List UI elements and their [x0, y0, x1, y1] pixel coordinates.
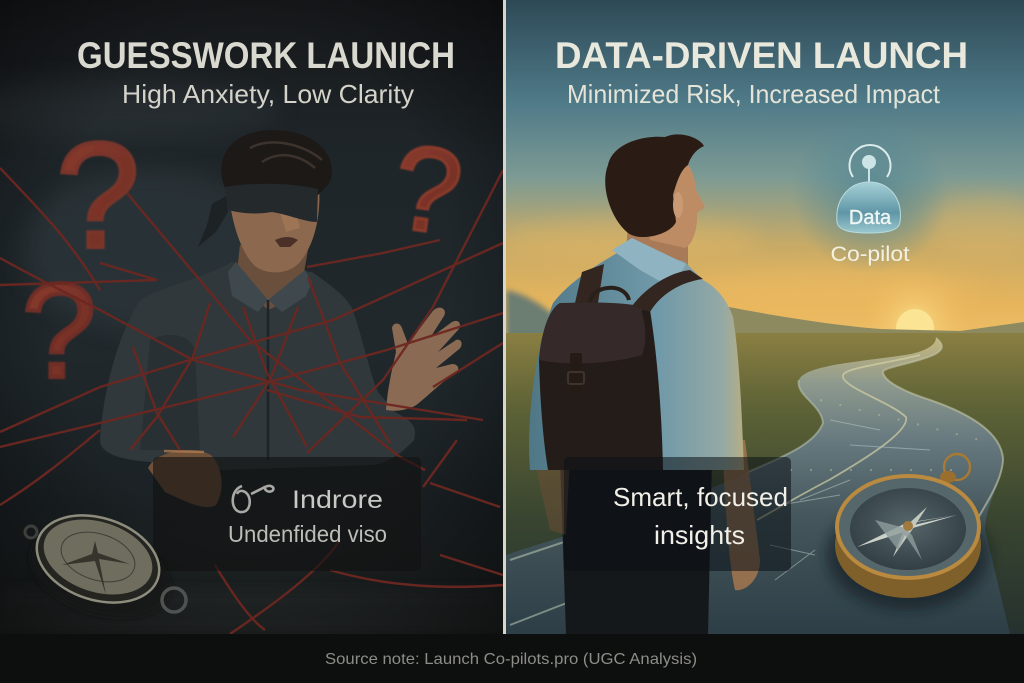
left arm	[536, 470, 570, 535]
center divider	[503, 0, 506, 634]
icon: question mark large: ?	[56, 111, 140, 279]
callout text: smart focused: Smart, focused	[613, 482, 788, 512]
shirt	[529, 245, 744, 470]
hair	[221, 130, 332, 195]
backpack	[539, 264, 703, 470]
panel: data-driven launch	[500, 0, 1024, 634]
shirt torso	[100, 262, 415, 470]
face	[231, 194, 320, 272]
title: data-driven launch: DATA-DRIVEN LAUNCH	[555, 35, 968, 76]
landscape	[506, 290, 1024, 634]
callout text: insights: insights	[654, 520, 745, 550]
title: guesswork launch: GUESSWORK LAUNICH	[77, 35, 455, 76]
head	[650, 164, 705, 248]
neck	[626, 232, 688, 265]
trousers	[560, 460, 712, 634]
callout heading: Indrore	[292, 486, 383, 514]
collar	[228, 262, 268, 312]
subtitle: minimized risk: Minimized Risk, Increased Impact	[567, 79, 941, 109]
icon: question mark lower: ?	[22, 257, 96, 406]
callout box: smart insights	[564, 457, 791, 571]
icon label: data: Data	[849, 207, 892, 229]
subtitle: high anxiety: High Anxiety, Low Clarity	[122, 79, 414, 109]
blindfold	[225, 184, 318, 222]
red tangled strings	[0, 168, 503, 634]
callout box: undefined vision	[153, 457, 421, 571]
panel: guesswork launch	[0, 0, 503, 634]
right arm	[722, 440, 760, 590]
neck	[236, 245, 308, 310]
icon: data co-pilot	[802, 144, 939, 268]
illustration: man with backpack	[529, 134, 760, 634]
footer bar	[0, 634, 1024, 683]
source note: Source note: Launch Co-pilots.pro (UGC Analysis)	[325, 651, 697, 668]
illustration: blindfolded man	[100, 130, 462, 507]
icon: question mark right: ?	[385, 119, 470, 261]
icon: old compass	[24, 514, 188, 614]
callout subtext: Undenfided viso	[228, 521, 387, 547]
icon: tangled hook	[233, 486, 273, 512]
icon: golden compass	[826, 454, 990, 610]
hair	[605, 134, 704, 237]
ear	[673, 192, 683, 218]
collar	[612, 238, 686, 281]
winding data road	[506, 338, 1010, 634]
raised hand	[386, 308, 462, 411]
sun	[886, 293, 945, 330]
icon label: co-pilot: Co-pilot	[830, 243, 910, 266]
resting hand	[148, 450, 222, 507]
